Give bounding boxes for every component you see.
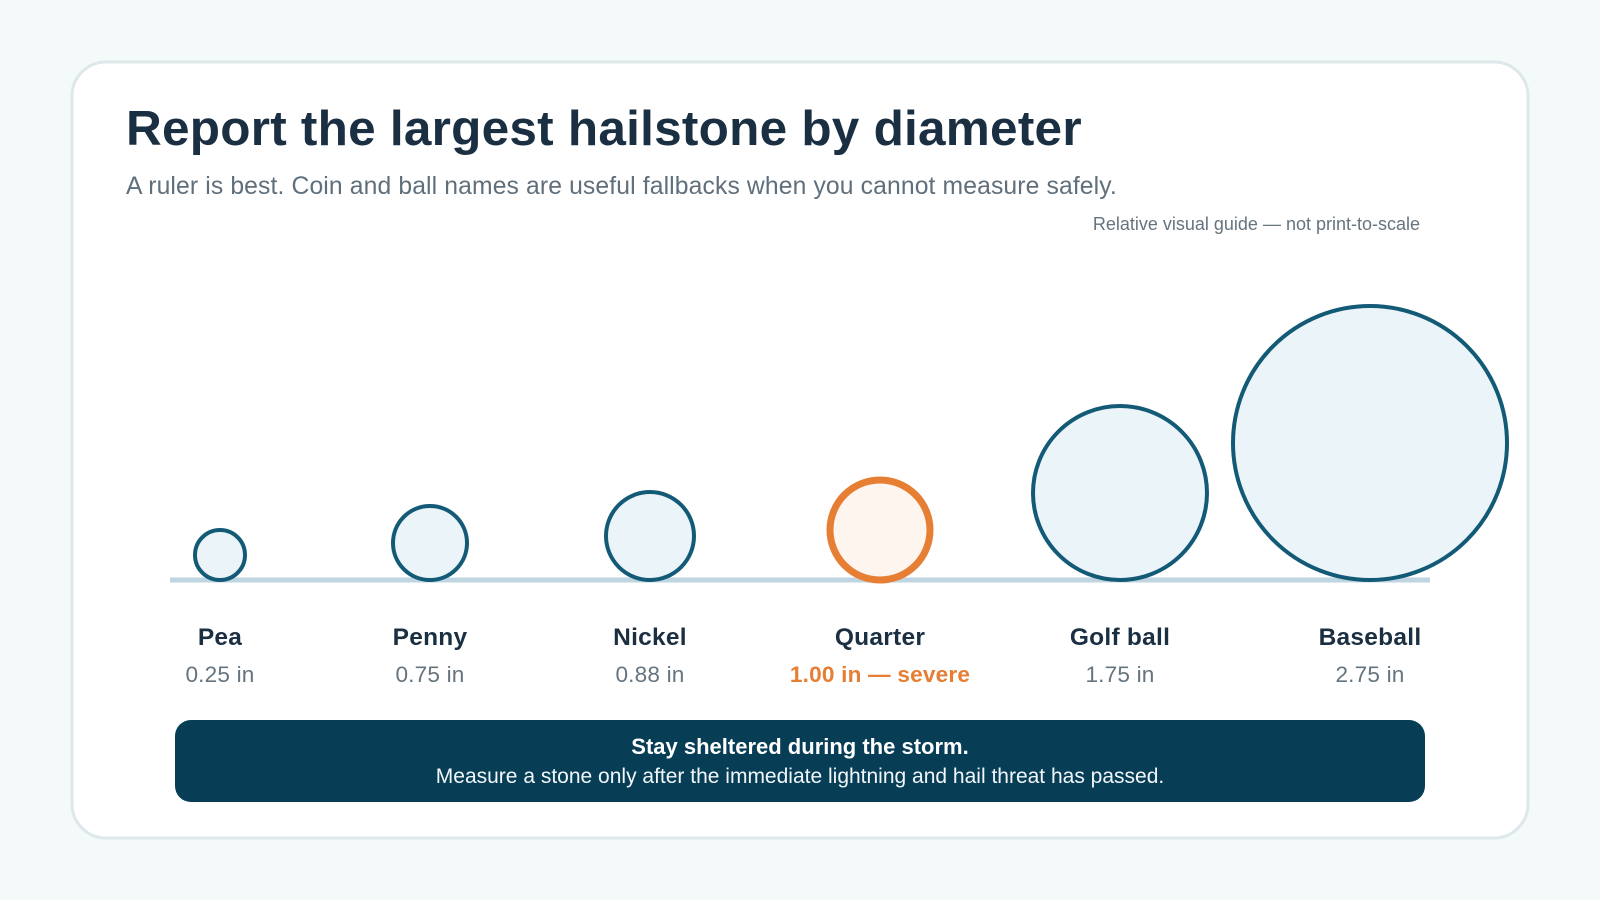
item: pea [185, 530, 255, 687]
item: pea: 0.25 in [185, 662, 255, 687]
item: nickel [606, 492, 694, 687]
item: quarter (severe threshold): 1.00 in — severe [790, 662, 970, 687]
safety banner: Measure a stone only after the immediate lightning and hail threat has passed. [436, 765, 1164, 788]
item: golf ball: Golf ball [1070, 624, 1170, 651]
title: Report the largest hailstone by diameter [126, 101, 1082, 156]
item: golf ball [1033, 406, 1207, 687]
item: quarter (severe threshold): Quarter [835, 624, 925, 651]
item: baseball: Baseball [1319, 624, 1421, 651]
safety banner [175, 720, 1425, 802]
safety banner: Stay sheltered during the storm. [631, 734, 969, 759]
ground line [170, 578, 1430, 582]
subtitle: A ruler is best. Coin and ball names are useful fallbacks when you cannot measure safely. [126, 173, 1117, 200]
item: baseball [1233, 306, 1507, 687]
item: penny [393, 506, 468, 687]
item: penny: Penny [393, 624, 468, 651]
item: nickel: Nickel [613, 624, 687, 651]
scale note: Relative visual guide — not print-to-scale [1093, 214, 1420, 234]
item: pea: Pea [198, 624, 242, 651]
item: golf ball: 1.75 in [1085, 662, 1155, 687]
item: nickel: 0.88 in [615, 662, 685, 687]
item: penny: 0.75 in [395, 662, 465, 687]
panel: main card [72, 62, 1528, 838]
item: quarter (severe threshold) [790, 480, 970, 687]
item: baseball: 2.75 in [1335, 662, 1405, 687]
